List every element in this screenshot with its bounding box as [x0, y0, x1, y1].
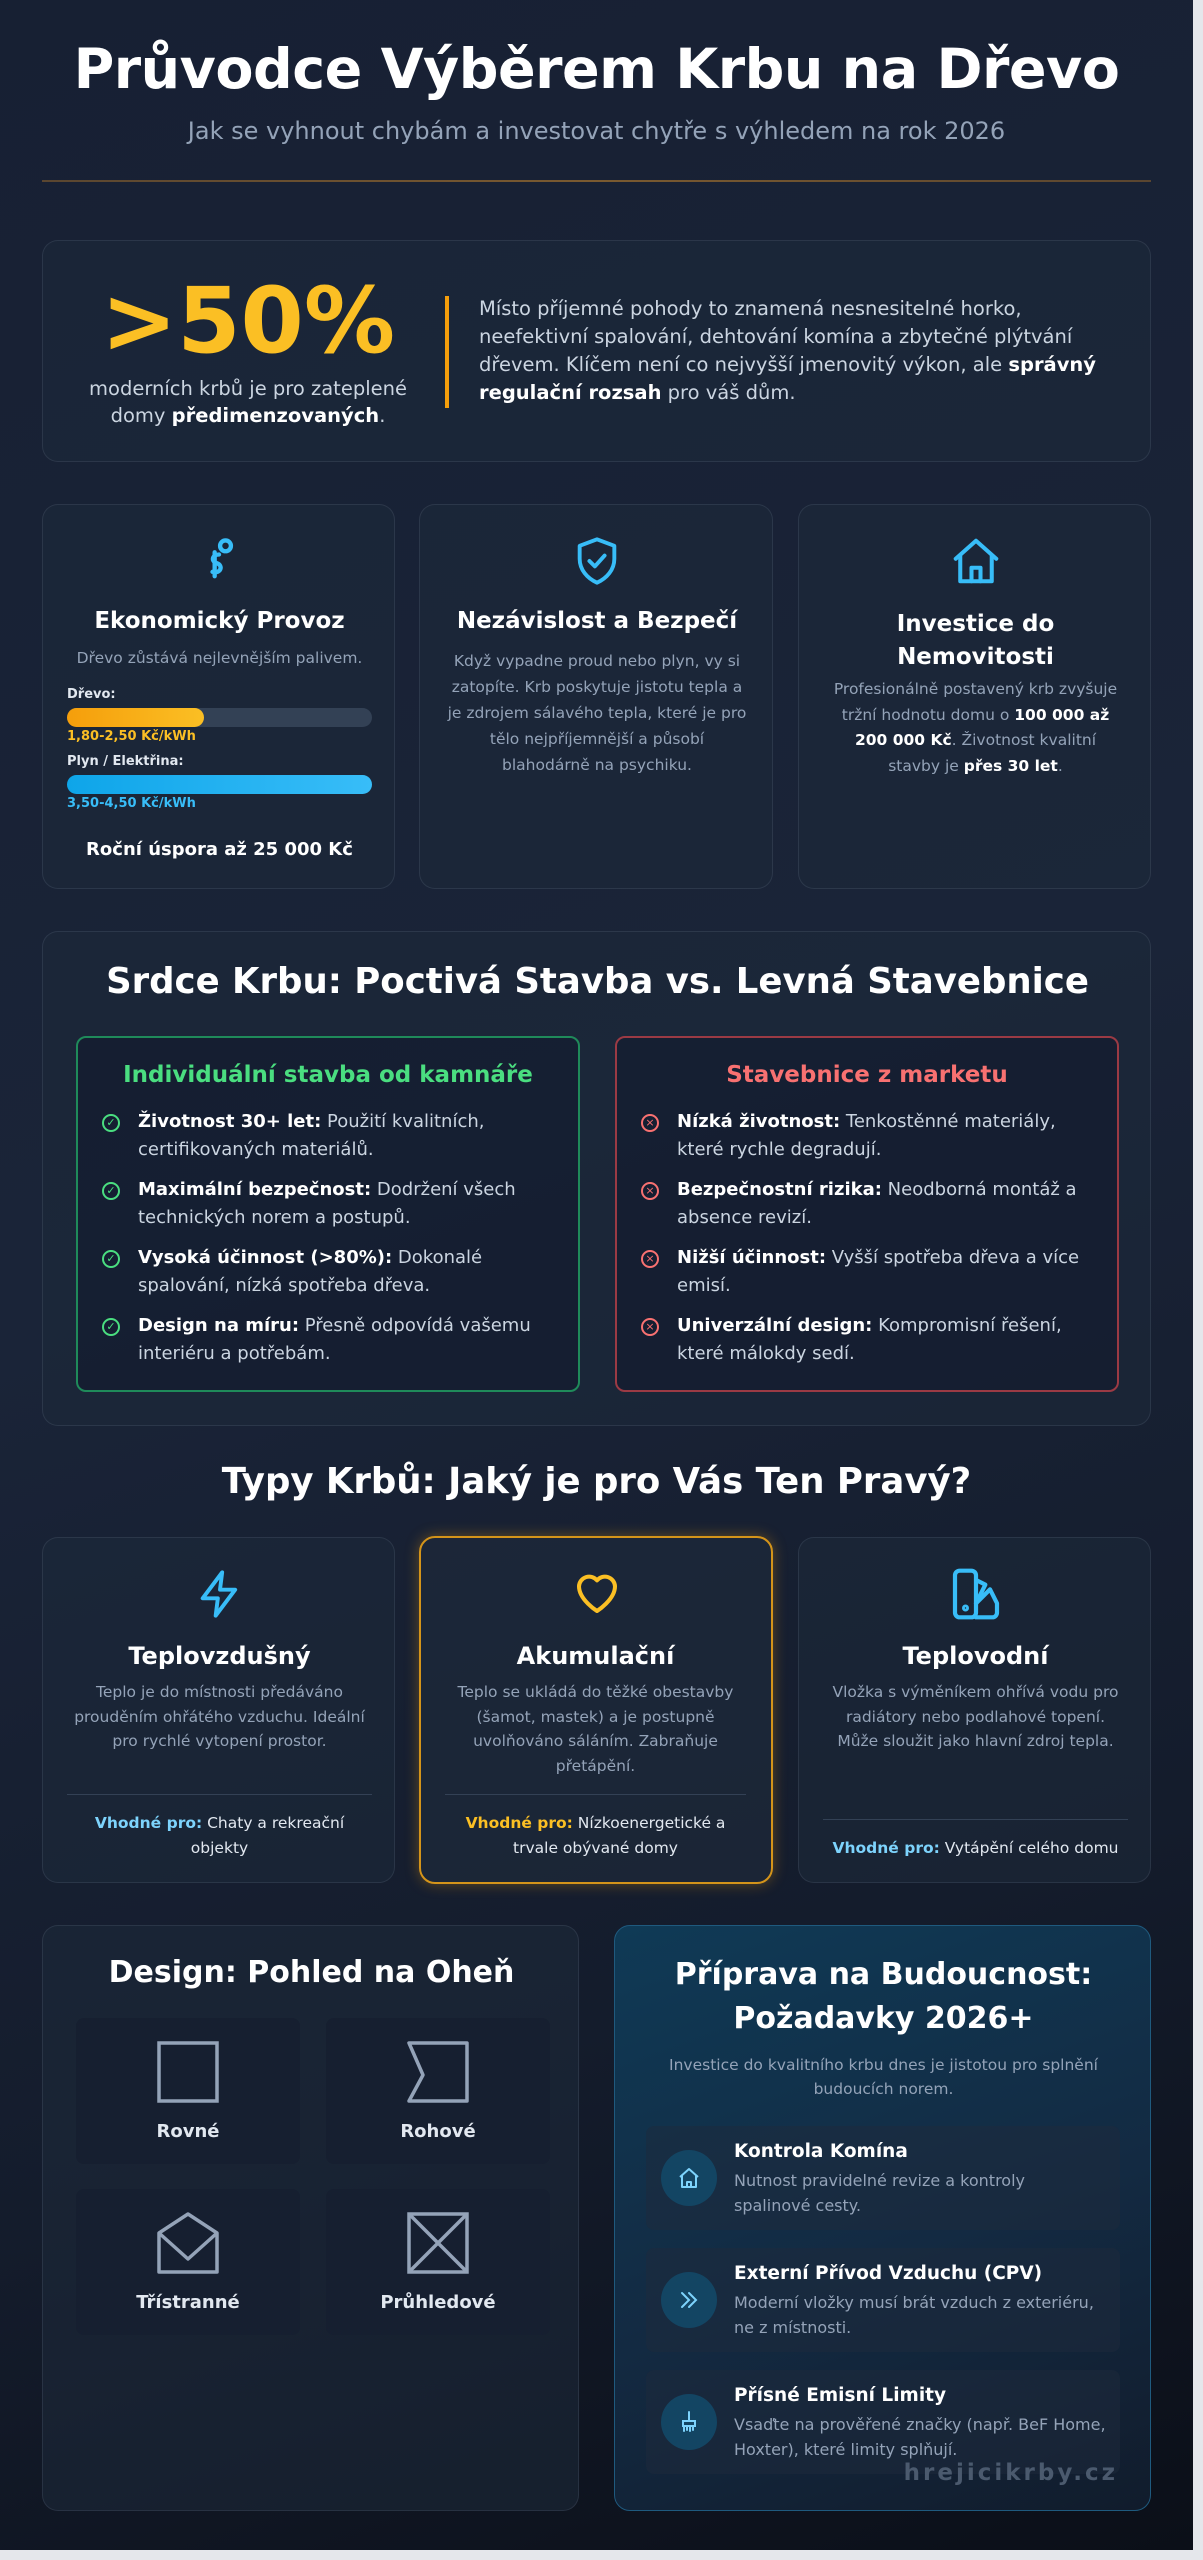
item: emissions: Vsaďte na prověřené značky (např. BeF Home, Hoxter), které limity splňují. — [734, 2415, 1106, 2459]
item: Bezpečnostní rizika: Neodborná montáž a absence revizí. — [677, 1179, 1077, 1228]
item: ✓ — [106, 1320, 116, 1333]
panel: economic — [42, 504, 395, 889]
panel: type accumulation: Teplo se ukládá do těžké obestavby (šamot, mastek) a je postupně uvolňováno sáláním. Zabraňuje přetápění. — [458, 1683, 733, 1774]
box: individual — [76, 1036, 580, 1392]
icon: shield — [578, 537, 616, 585]
panel: design — [42, 1925, 579, 2511]
panel: design: Design: Pohled na Oheň — [109, 1955, 514, 1990]
item: × — [645, 1184, 655, 1197]
tile: three-sided: Třístranné — [136, 2292, 240, 2313]
item: ✓ — [106, 1252, 116, 1265]
big stat: >50% — [101, 269, 395, 374]
tile: see-through — [326, 2189, 550, 2335]
panel: economic: Roční úspora až 25 000 Kč — [86, 839, 353, 860]
panel: type accumulation: Vhodné pro: Nízkoenergetické a trvale obývané domy — [466, 1814, 725, 1857]
panel: investment: Profesionálně postavený krb zvyšuje tržní hodnotu domu o 100 000 až 200 000 Kč. Životnost kvalitní stavby je přes 30 let. — [834, 680, 1117, 774]
item: × — [645, 1252, 655, 1265]
panel: type hot-air: Teplovzdušný — [128, 1642, 311, 1670]
tile: three-sided — [76, 2189, 300, 2335]
panel: economic: Dřevo zůstává nejlevnějším palivem. — [77, 649, 362, 667]
panel: future: Požadavky 2026+ — [733, 2001, 1034, 2036]
big stat: moderních krbů je pro zateplené — [89, 377, 407, 400]
tile: see-through: Průhledové — [380, 2292, 496, 2313]
heading: Srdce Krbu: Poctivá Stavba vs. Levná Stavebnice — [106, 961, 1089, 1002]
item: Nižší účinnost: Vyšší spotřeba dřeva a více emisí. — [677, 1247, 1079, 1296]
bar chart: fuel prices: Plyn / Elektřina: — [67, 754, 184, 769]
panel: investment: Nemovitosti — [897, 644, 1054, 670]
panel: investment — [798, 504, 1151, 889]
tile: straight: Rovné — [156, 2121, 219, 2142]
item: × — [645, 1116, 655, 1129]
panel: stat — [42, 240, 1151, 462]
item: Vysoká účinnost (>80%): Dokonalé spalování, nízká spotřeba dřeva. — [138, 1247, 482, 1296]
panel: future — [614, 1925, 1151, 2511]
bar chart: fuel prices: 3,50-4,50 Kč/kWh — [67, 796, 196, 811]
item: Maximální bezpečnost: Dodržení všech technických norem a postupů. — [138, 1179, 516, 1228]
panel: investment: Investice do — [897, 611, 1054, 637]
panel: type hot-air: Teplo je do místnosti předáváno prouděním ohřátého vzduchu. Ideální pro rychlé vytopení prostor. — [74, 1683, 365, 1750]
bar chart: fuel prices — [67, 687, 372, 811]
item: air supply: Moderní vložky musí brát vzduch z exteriéru, ne z místnosti. — [734, 2293, 1094, 2337]
icon: heart — [577, 1574, 617, 1613]
big stat — [89, 269, 407, 427]
item: chimney — [646, 2126, 1120, 2230]
item: ✓ — [106, 1116, 116, 1129]
icon: coins — [210, 538, 234, 578]
title: Průvodce Výběrem Krbu na Dřevo — [74, 37, 1119, 102]
panel: independence — [419, 504, 773, 889]
panel: type accumulation — [419, 1536, 773, 1884]
panel: future: Investice do kvalitního krbu dnes je jistotou pro splnění budoucích norem. — [669, 2056, 1098, 2098]
item: Nízká životnost: Tenkostěnné materiály, které rychle degradují. — [677, 1111, 1056, 1160]
panel: independence: Nezávislost a Bezpečí — [457, 608, 737, 634]
panel: comparison — [42, 931, 1151, 1426]
icon: tablet — [952, 1568, 1000, 1620]
panel: type water — [798, 1537, 1151, 1883]
panel: type water: Vhodné pro: Vytápění celého domu — [832, 1839, 1118, 1857]
box: market kit — [615, 1036, 1119, 1392]
item: air supply — [646, 2248, 1120, 2352]
item: chimney: Kontrola Komína — [734, 2141, 908, 2162]
item: × — [645, 1320, 655, 1333]
item: emissions — [646, 2370, 1120, 2474]
big stat: domy předimenzovaných. — [111, 404, 385, 427]
panel: economic: Ekonomický Provoz — [94, 608, 345, 634]
icon: house — [954, 538, 998, 584]
tile: corner: Rohové — [400, 2121, 476, 2142]
icon: bolt — [200, 1570, 238, 1618]
watermark: hrejicikrby.cz — [904, 2460, 1118, 2486]
subtitle: Jak se vyhnout chybám a investovat chytře s výhledem na rok 2026 — [188, 117, 1005, 145]
bar chart: fuel prices: 1,80-2,50 Kč/kWh — [67, 729, 196, 744]
panel: type accumulation: Akumulační — [517, 1642, 674, 1670]
item: Životnost 30+ let: Použití kvalitních, certifikovaných materiálů. — [138, 1111, 484, 1160]
panel: future: Příprava na Budoucnost: — [675, 1957, 1092, 1992]
box: market kit: Stavebnice z marketu — [726, 1062, 1008, 1088]
tile: straight — [76, 2018, 300, 2164]
item: Design na míru: Přesně odpovídá vašemu interiéru a potřebám. — [138, 1315, 531, 1364]
tile: corner — [326, 2018, 550, 2164]
bar chart: fuel prices: Dřevo: — [67, 687, 116, 702]
stat explanation: Místo příjemné pohody to znamená nesnesitelné horko, neefektivní spalování, dehtování komína a zbytečné plýtvání dřevem. Klíčem není co nejvyšší jmenovitý výkon, ale správný regulační rozsah pro váš dům. — [479, 297, 1096, 404]
item: emissions: Přísné Emisní Limity — [734, 2385, 946, 2406]
item: air supply: Externí Přívod Vzduchu (CPV) — [734, 2263, 1042, 2284]
item: Univerzální design: Kompromisní řešení, které málokdy sedí. — [677, 1315, 1062, 1364]
panel: type hot-air — [42, 1537, 395, 1883]
panel: type hot-air: Vhodné pro: Chaty a rekreační objekty — [95, 1814, 344, 1857]
item: chimney: Nutnost pravidelné revize a kontroly spalinové cesty. — [734, 2171, 1025, 2215]
panel: type water: Vložka s výměníkem ohřívá vodu pro radiátory nebo podlahové topení. Může sloužit jako hlavní zdroj tepla. — [833, 1683, 1118, 1750]
heading: types: Typy Krbů: Jaký je pro Vás Ten Pravý? — [222, 1461, 971, 1502]
box: individual: Individuální stavba od kamnáře — [123, 1062, 533, 1088]
panel: type water: Teplovodní — [902, 1642, 1048, 1670]
item: ✓ — [106, 1184, 116, 1197]
panel: independence: Když vypadne proud nebo plyn, vy si zatopíte. Krb poskytuje jistotu tepla a je zdrojem sálavého tepla, které je pro tělo nejpříjemnější a působí blahodárně na psychiku. — [448, 652, 746, 774]
